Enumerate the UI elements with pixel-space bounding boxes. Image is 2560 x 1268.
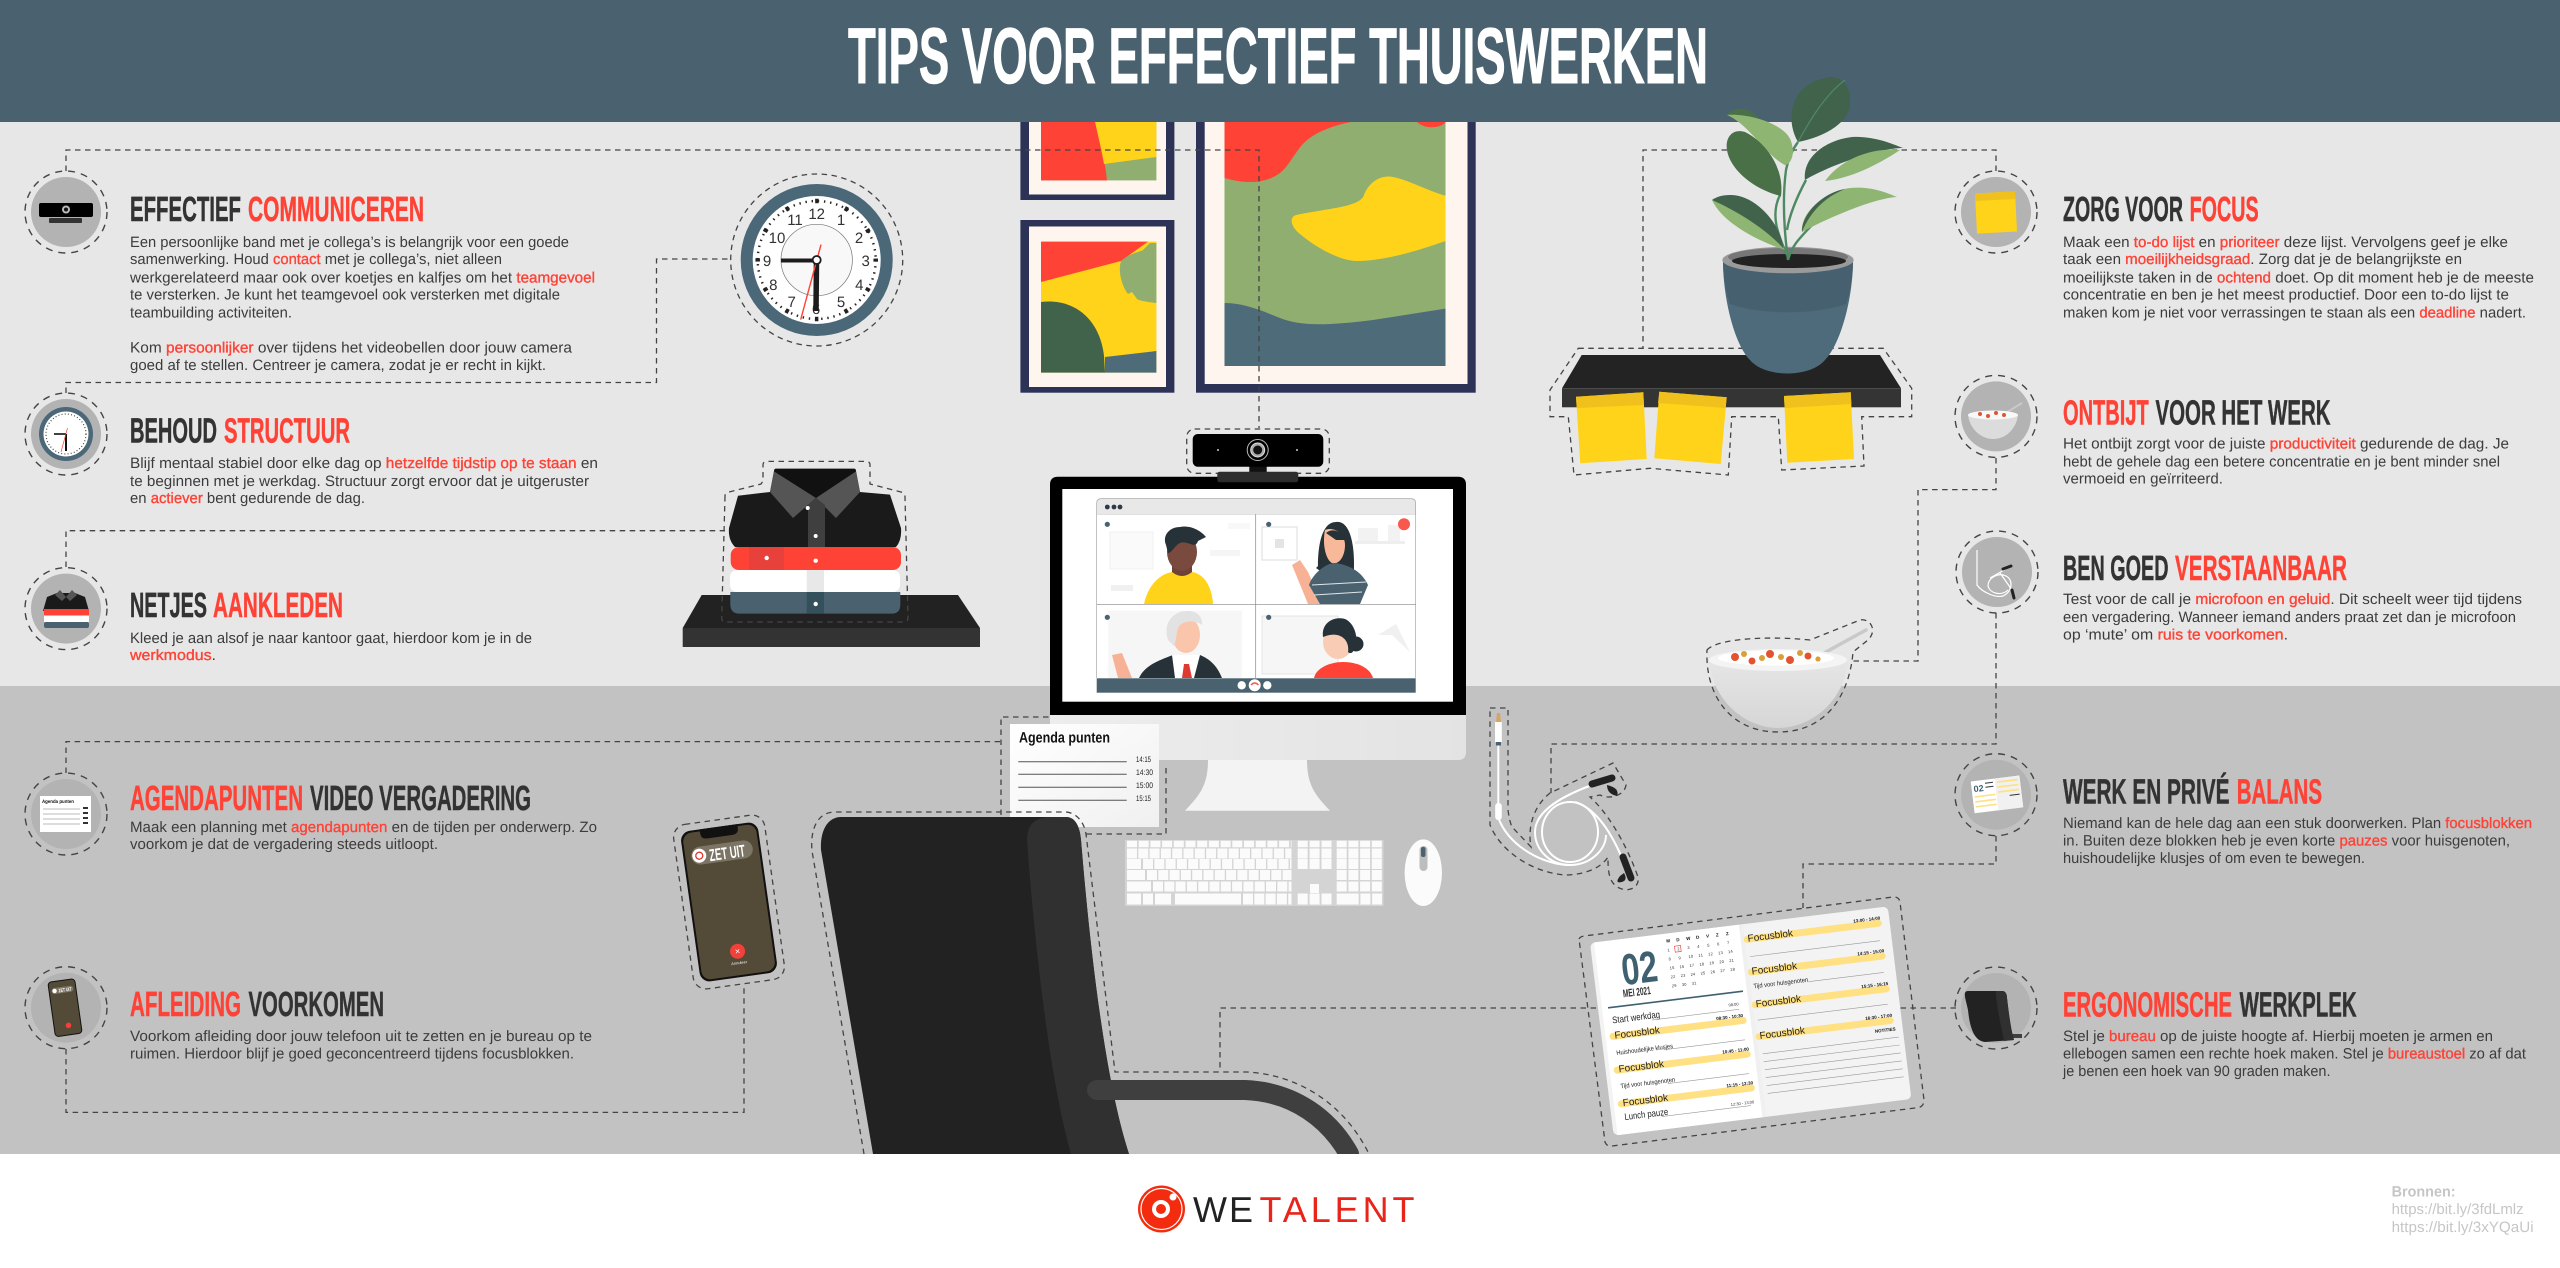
heading: WERK EN PRIVÉ	[2063, 772, 2230, 812]
left page schedule: Start werkdag	[1612, 1010, 1661, 1026]
body text: Een persoonlijke band met je collega’s is belangrijk voor een goede	[130, 234, 569, 251]
body text: Het ontbijt zorgt voor de juiste productiviteit gedurende de dag. Je	[2063, 436, 2509, 453]
body text: samenwerking. Houd contact met je collega’s, niet alleen	[130, 251, 502, 268]
call control bar	[1097, 678, 1416, 693]
heading: AGENDAPUNTEN	[130, 779, 303, 818]
icon: bowl badge	[1955, 375, 2037, 457]
icon: webcam badge	[25, 171, 107, 253]
icon: phone badge	[25, 967, 107, 1049]
left page schedule: Focusblok	[1614, 1025, 1661, 1042]
agenda dashed outline	[1001, 717, 1166, 834]
icon: wall clock: 11	[787, 212, 803, 229]
body text: Maak een to-do lijst en prioriteer deze lijst. Vervolgens geef je elke	[2063, 234, 2508, 251]
monitor screen	[1062, 489, 1453, 702]
right page schedule: 16:30 - 17:00	[1865, 1013, 1893, 1021]
panel: effectief communiceren	[25, 171, 595, 374]
person: woman in red shirt	[1314, 618, 1373, 678]
monitor chin	[1050, 710, 1466, 760]
monitor bezel	[1050, 477, 1466, 715]
body text: je benen een hoek van 90 graden maken.	[2062, 1063, 2330, 1080]
icon: planner	[1579, 897, 1924, 1146]
frame: large painting	[1196, 90, 1476, 393]
left page schedule	[1607, 999, 1757, 1124]
right page schedule: Tijd voor huisgenoten	[1753, 977, 1809, 990]
icon: wall clock: 2	[855, 230, 863, 247]
mini calendar	[1666, 931, 1737, 988]
person: man in suit	[1112, 611, 1222, 678]
body text: en actiever bent gedurende de dag.	[130, 490, 365, 507]
heading: VIDEO VERGADERING	[310, 779, 531, 818]
icon: planner badge	[1955, 754, 2037, 836]
icon: webcam	[1187, 429, 1329, 474]
icon: cereal bowl	[1707, 620, 1873, 732]
heading: AANKLEDEN	[213, 586, 343, 625]
body text	[2063, 234, 2534, 322]
heading: EFFECTIEF	[130, 190, 241, 229]
heading: COMMUNICEREN	[248, 190, 424, 229]
monitor	[1050, 472, 1466, 811]
frame: top small painting	[1020, 90, 1174, 200]
icon: wall clock: 10	[769, 230, 785, 247]
body text: maken kom je niet voor verrassingen te staan als een deadline nadert.	[2063, 304, 2526, 322]
heading: VOOR HET WERK	[2156, 394, 2330, 433]
right page schedule: 15:15 - 16:15	[1861, 981, 1889, 989]
right page schedule: 13:00 - 14:00	[1853, 915, 1881, 924]
right page schedule: Focusblok	[1747, 928, 1795, 945]
panel: afleiding voorkomen	[25, 967, 592, 1063]
body text: ruimen. Hierdoor blijf je goed geconcentreerd tijdens focusblokken.	[130, 1046, 574, 1063]
body text: Niemand kan de hele dag aan een stuk doorwerken. Plan focusblokken	[2063, 815, 2532, 832]
agenda paper: 14:30	[1136, 768, 1153, 777]
mini calendar: 1234567	[1667, 940, 1730, 953]
body text: te versterken. Je kunt het teamgevoel ook versterken met digitale	[130, 287, 560, 304]
agenda paper: 15:00	[1136, 781, 1153, 790]
icon: wall clock: 9	[763, 253, 771, 270]
keyboard	[1125, 840, 1384, 906]
icon: earphones	[1490, 708, 1638, 890]
body text: werkmodus .	[129, 647, 216, 664]
left page schedule: 10:45 - 11:00	[1722, 1046, 1750, 1055]
panel: ontbijt voor het werk	[1955, 375, 2509, 488]
panel: werk en prive balans	[1955, 754, 2532, 867]
heading: BALANS	[2237, 773, 2322, 812]
agenda paper	[1010, 724, 1159, 827]
icon: plant leaves	[1712, 77, 1903, 260]
body text: te beginnen met je werkdag. Structuur zorgt ervoor dat je uitgeruster	[130, 473, 589, 490]
icon: phone	[672, 813, 786, 991]
logo mark	[1138, 1186, 1185, 1232]
icon: wall clock: 1	[837, 212, 845, 229]
body text: Kom persoonlijker over tijdens het videobellen door jouw camera	[130, 340, 573, 356]
body text	[2063, 591, 2522, 644]
logo: WE	[1193, 1189, 1253, 1230]
left page schedule: 08:30 - 10:30	[1716, 1013, 1744, 1021]
body text: Maak een planning met agendapunten en de tijden per onderwerp. Zo	[130, 819, 597, 836]
right page schedule: NOTITIES	[1875, 1026, 1896, 1034]
icon: phone badge: ZET UIT	[58, 987, 72, 994]
icon: wall clock: 5	[837, 294, 845, 311]
icon: wall clock: 4	[855, 277, 863, 294]
icon: chair badge	[1955, 967, 2037, 1049]
body text: concentratie en ben je het meest productief. Door een to-do lijst te	[2063, 287, 2509, 304]
icon: phone: ZET UIT	[708, 841, 747, 865]
body text	[2063, 815, 2532, 867]
desk background	[0, 686, 2560, 1154]
body text: Stel je bureau op de juiste hoogte af. Hierbij moeten je armen en	[2063, 1028, 2493, 1045]
left page schedule: 11:15 - 12:30	[1726, 1080, 1754, 1088]
body text: goed af te stellen. Centreer je camera, zodat je er recht in kijkt.	[130, 357, 546, 374]
body text: een vergadering. Wanneer iemand anders praat zet dan je microfoon	[2063, 609, 2516, 626]
body text: vermoeid en geïrriteerd.	[2063, 471, 2223, 488]
mini calendar: 15161718192021	[1669, 958, 1735, 970]
heading: BEHOUD	[130, 412, 217, 450]
heading: STRUCTUUR	[224, 412, 350, 450]
body text	[2063, 436, 2509, 488]
icon: sticky note badge	[1955, 171, 2037, 253]
panel: zorg voor focus	[1955, 171, 2534, 322]
body text: hebt de gehele dag een betere concentratie en je bent minder snel	[2063, 453, 2500, 470]
monitor stand	[1185, 760, 1330, 811]
body text	[129, 630, 532, 664]
body text: taak een moeilijkheidsgraad. Zorg dat je de belangrijkste en	[2063, 251, 2462, 268]
heading: VOORKOMEN	[248, 985, 384, 1024]
body text: werkgerelateerd maar ook over koetjes en kalfjes om het teamgevoel	[129, 270, 595, 286]
person: man in yellow shirt	[1144, 527, 1213, 604]
agenda paper: 14:15	[1136, 755, 1151, 764]
icon: agenda badge: Agenda punten	[42, 799, 74, 805]
icon: wall clock: 3	[862, 253, 870, 270]
mini calendar: MDWDVZZ	[1666, 931, 1729, 944]
sources: https://bit.ly/3fdLmlz	[2392, 1201, 2524, 1218]
person: woman in striped shirt	[1292, 518, 1410, 604]
icon: wall clock: 7	[788, 294, 796, 311]
left page schedule: Lunch pauze	[1624, 1107, 1669, 1123]
icon: folded shirts on shelf	[683, 461, 980, 647]
body text: Test voor de call je microfoon en geluid . Dit scheelt weer tijd tijdens	[2063, 591, 2522, 608]
icon: planner: MEI 2021	[1622, 985, 1652, 1000]
heading: BEN GOED	[2063, 549, 2168, 588]
left page schedule: Focusblok	[1622, 1093, 1670, 1109]
left page schedule: Huishoudelijke klusjes	[1616, 1043, 1674, 1057]
icon: shirt badge	[25, 568, 107, 650]
left page schedule: Focusblok	[1618, 1059, 1666, 1075]
heading	[130, 190, 424, 229]
video call window	[1097, 499, 1416, 693]
icon: planner badge: 02	[1973, 783, 1984, 794]
icon: clock badge	[25, 393, 107, 475]
body text: voorkom je dat de vergadering steeds uitloopt.	[130, 836, 438, 853]
mini calendar: 891011121314	[1668, 949, 1734, 962]
body text: huishoudelijke klusjes of om even te bewegen.	[2063, 850, 2365, 867]
icon: wall clock: 8	[769, 277, 777, 294]
heading: ERGONOMISCHE	[2063, 985, 2232, 1024]
sources: Bronnen:	[2392, 1184, 2456, 1201]
heading: AFLEIDING	[130, 985, 241, 1024]
heading	[2063, 549, 2347, 588]
header bar	[0, 0, 2560, 122]
body text: in. Buiten deze blokken heb je even korte pauzes voor huisgenoten,	[2063, 833, 2510, 850]
wall background	[0, 0, 2560, 686]
right page schedule: Focusblok	[1751, 961, 1799, 977]
panel: behoud structuur	[25, 393, 598, 507]
icon: planner: 02	[1619, 942, 1660, 995]
heading	[130, 586, 343, 625]
panel: netjes aankleden	[25, 568, 532, 664]
body text: ellebogen samen een rechte hoek maken. Stel je bureaustoel zo af dat	[2063, 1046, 2527, 1063]
left page schedule: 08:00	[1728, 1001, 1740, 1008]
heading: WERKPLEK	[2240, 985, 2357, 1024]
footer	[0, 1154, 2560, 1268]
icon: shelf with sticky notes and plant	[1550, 77, 1912, 475]
frame: lower small painting	[1020, 220, 1174, 393]
webcam clamp	[1217, 472, 1298, 482]
right page schedule: 14:15 - 15:00	[1857, 948, 1885, 956]
mini calendar: 293031	[1672, 980, 1697, 988]
mouse	[1405, 839, 1442, 906]
sources: https://bit.ly/3xYQaUi	[2392, 1219, 2534, 1236]
right page schedule	[1743, 915, 1904, 1094]
left page schedule: 12:30 - 13:00	[1730, 1099, 1755, 1107]
icon: phone: Annuleer	[731, 959, 748, 966]
mini calendar: 22232425262728	[1670, 966, 1736, 979]
left page schedule: Tijd voor huisgenoten	[1620, 1077, 1676, 1090]
icon: office chair	[812, 812, 1369, 1154]
icon: agenda badge	[25, 773, 107, 855]
logo	[1138, 1186, 1414, 1232]
body text	[129, 234, 595, 374]
agenda paper: Agenda punten	[1019, 730, 1110, 747]
icon: wall clock: 12	[808, 206, 825, 223]
icon: earphones badge	[1956, 531, 2038, 613]
body text: Kleed je aan alsof je naar kantoor gaat, hierdoor kom je in de	[130, 630, 532, 647]
body text	[130, 1028, 592, 1063]
right page schedule: Focusblok	[1755, 994, 1803, 1010]
panel: agendapunten video vergadering	[25, 773, 597, 855]
right page schedule: Focusblok	[1759, 1025, 1807, 1042]
body text	[130, 455, 598, 507]
heading: VERSTAANBAAR	[2175, 549, 2347, 588]
heading: ONTBIJT	[2063, 394, 2149, 433]
panel: ergonomische werkplek	[1955, 967, 2527, 1080]
body text	[2062, 1028, 2527, 1080]
body text: Blijf mentaal stabiel door elke dag op hetzelfde tijdstip op te staan en	[130, 455, 598, 472]
heading: ZORG VOOR	[2063, 190, 2183, 229]
body text	[130, 819, 597, 853]
heading: FOCUS	[2190, 190, 2259, 229]
heading	[130, 412, 350, 450]
heading	[2063, 394, 2330, 433]
logo: TALENT	[1260, 1189, 1414, 1230]
agenda paper: 15:15	[1136, 794, 1151, 803]
body text: teambuilding activiteiten.	[130, 304, 292, 322]
heading: NETJES	[130, 586, 207, 625]
connectors	[66, 150, 1996, 1112]
icon: wall clock: 6	[812, 301, 820, 318]
body text: Voorkom afleiding door jouw telefoon uit te zetten en je bureau op te	[130, 1028, 592, 1045]
body text: op ‘mute’ om ruis te voorkomen .	[2063, 627, 2288, 644]
panel: ben goed verstaanbaar	[1956, 531, 2522, 644]
icon: wall clock	[731, 174, 903, 346]
icon: plant pot	[1722, 247, 1854, 374]
body text: moeilijkste taken in de ochtend doet. Op dit moment heb je de meeste	[2063, 270, 2534, 286]
sources	[2392, 1184, 2534, 1236]
title: TIPS VOOR EFFECTIEF THUISWERKEN	[848, 11, 1708, 100]
icon: phone: ×	[734, 946, 741, 957]
